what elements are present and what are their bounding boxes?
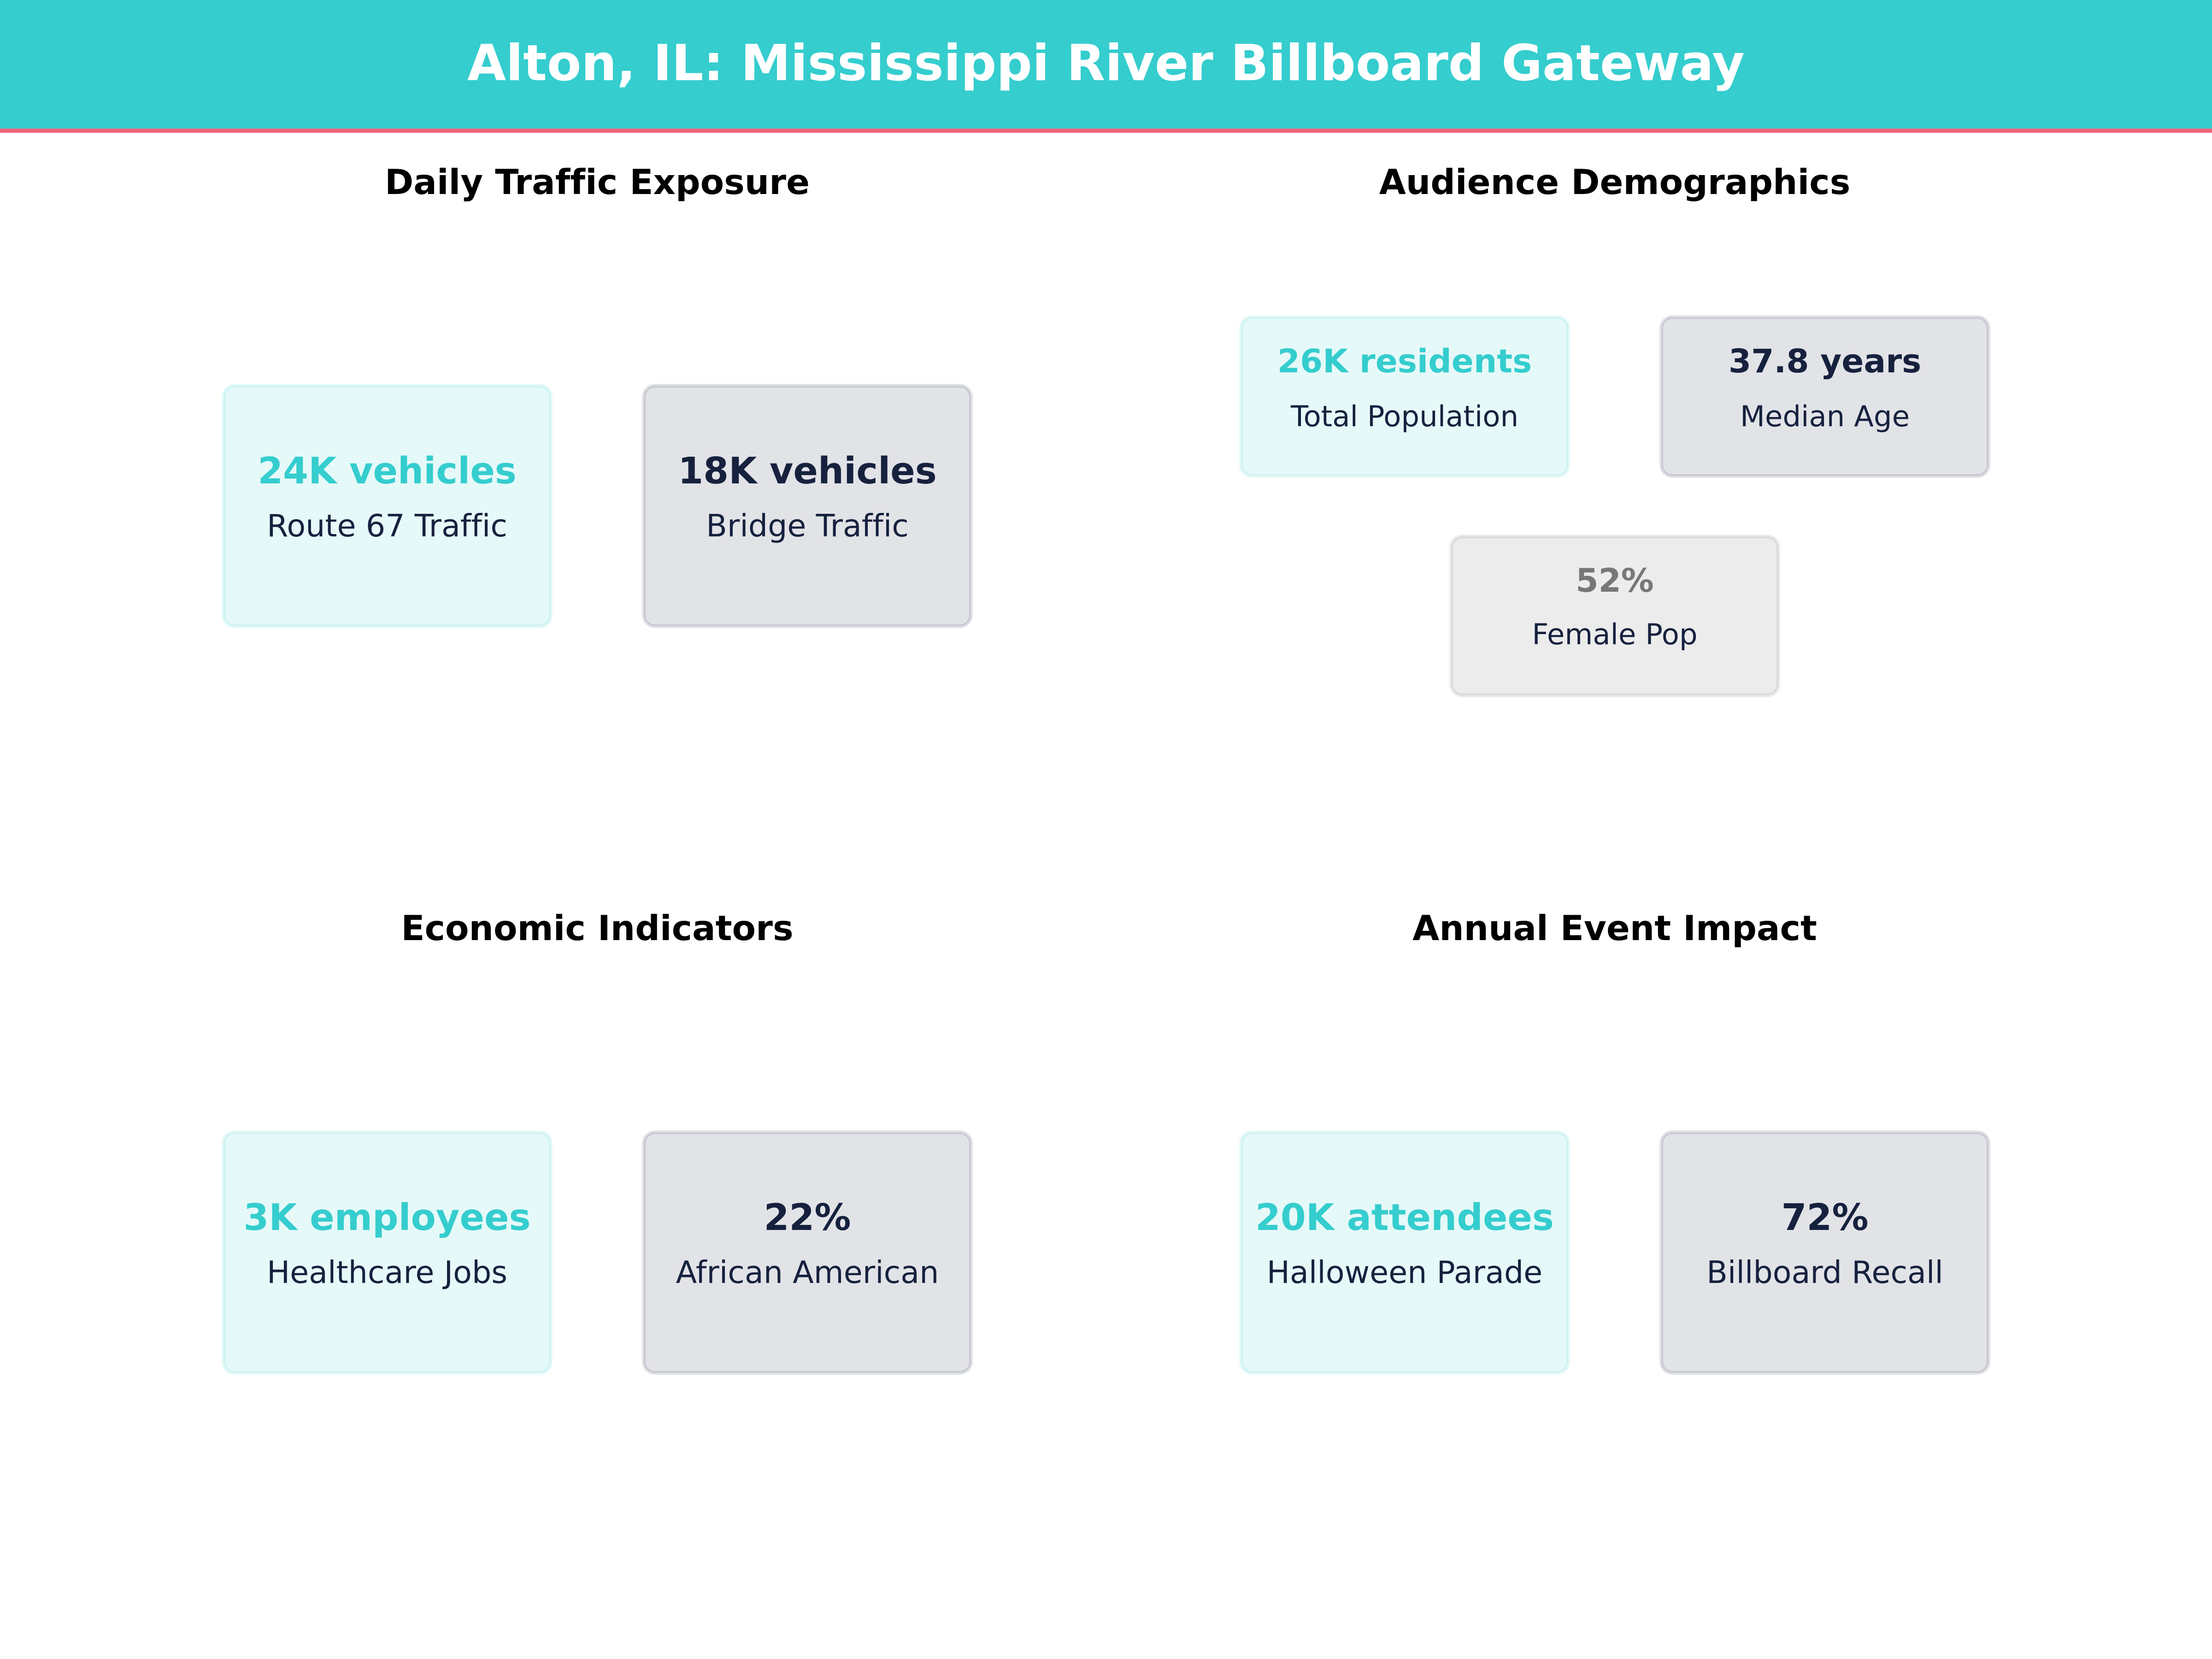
- panel: daily traffic exposure: [224, 162, 971, 626]
- card: total population: [1241, 317, 1568, 476]
- card: median age: [1661, 317, 1988, 476]
- card: route 67 traffic: 24K vehicles: [258, 450, 517, 492]
- heading: annual event impact: Annual Event Impact: [1412, 908, 1817, 948]
- card: female population: [1451, 536, 1778, 695]
- card: african american: African American: [676, 1254, 939, 1290]
- card: african american: [644, 1132, 971, 1373]
- card: billboard recall: Billboard Recall: [1706, 1254, 1943, 1290]
- card: female population: 52%: [1576, 561, 1654, 600]
- card: billboard recall: 72%: [1781, 1196, 1869, 1239]
- card: median age: Median Age: [1740, 400, 1910, 433]
- card: african american: 22%: [764, 1196, 851, 1239]
- card: healthcare jobs: 3K employees: [243, 1196, 531, 1239]
- card: bridge traffic: [644, 386, 971, 626]
- header banner: [0, 0, 2212, 133]
- card: total population: Total Population: [1290, 400, 1518, 433]
- card: halloween parade: 20K attendees: [1255, 1196, 1554, 1239]
- panel: annual event impact: [1241, 908, 1988, 1373]
- card: halloween parade: Halloween Parade: [1267, 1254, 1542, 1290]
- card: total population: 26K residents: [1277, 342, 1532, 380]
- card: healthcare jobs: [224, 1132, 551, 1373]
- card: healthcare jobs: Healthcare Jobs: [267, 1254, 507, 1290]
- heading: daily traffic exposure: Daily Traffic Exposure: [385, 162, 810, 202]
- card: female population: Female Pop: [1532, 618, 1698, 651]
- card: median age: 37.8 years: [1729, 342, 1921, 380]
- card: billboard recall: [1661, 1132, 1988, 1373]
- card: bridge traffic: 18K vehicles: [678, 450, 937, 492]
- heading: audience demographics: Audience Demographics: [1379, 162, 1850, 202]
- title: Alton, IL: Mississippi River Billboard Gateway: [467, 34, 1745, 92]
- panel: audience demographics: [1241, 162, 1988, 695]
- panel: economic indicators: [224, 908, 971, 1373]
- card: halloween parade: [1241, 1132, 1568, 1373]
- heading: economic indicators: Economic Indicators: [401, 908, 794, 948]
- card: route 67 traffic: [224, 386, 551, 626]
- card: route 67 traffic: Route 67 Traffic: [267, 508, 507, 544]
- card: bridge traffic: Bridge Traffic: [706, 508, 909, 544]
